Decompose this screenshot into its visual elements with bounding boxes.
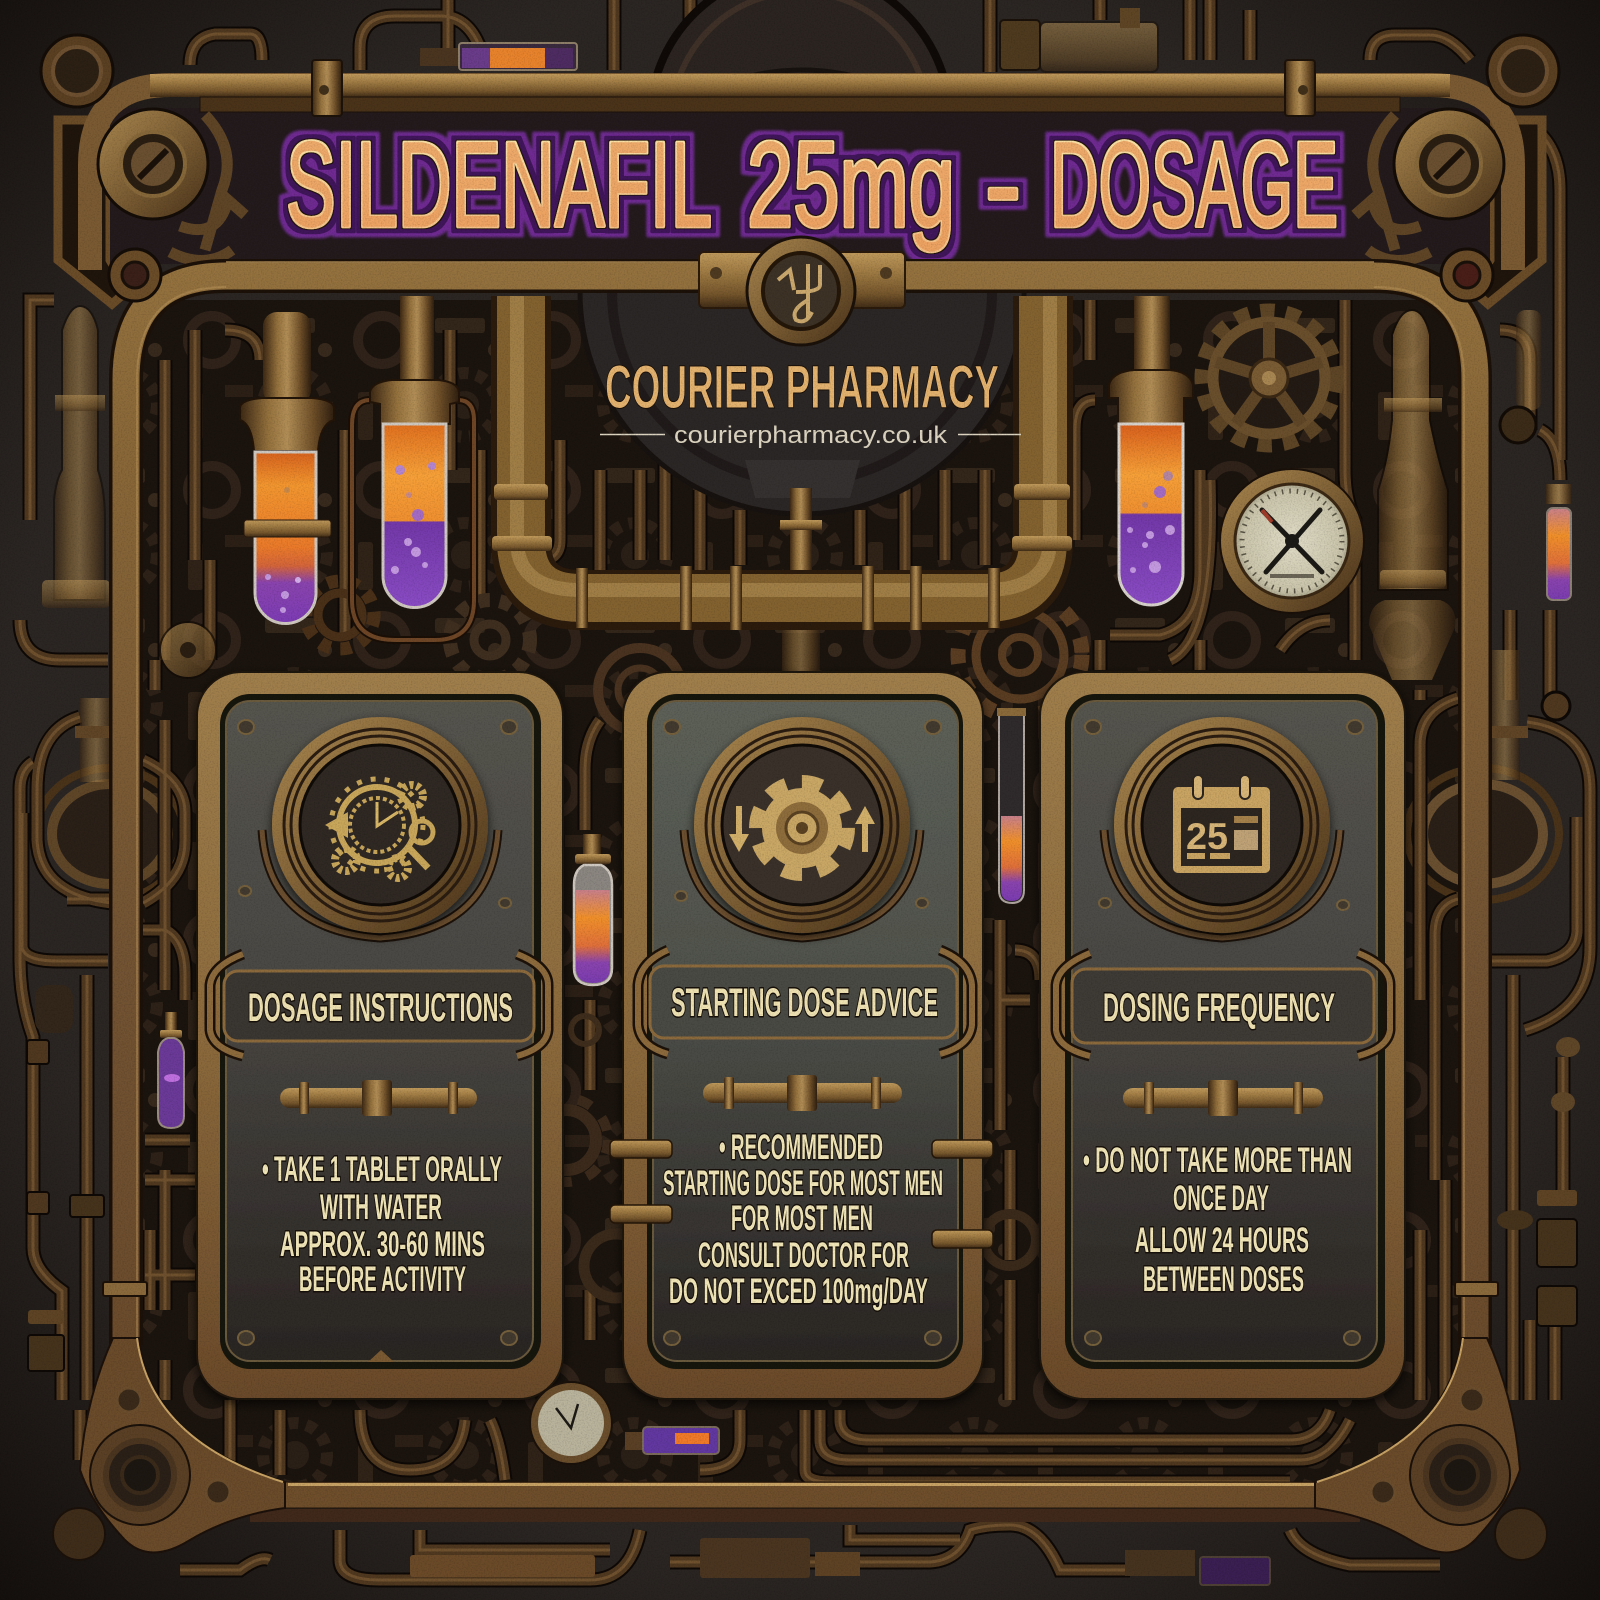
body text: ALLOW 24 HOURS (1135, 1221, 1309, 1260)
clamps (610, 1140, 993, 1248)
body text: WITH WATER (320, 1188, 442, 1227)
vial right (1546, 484, 1572, 600)
rusty ring: centre (598, 648, 682, 732)
corner bolt bottom left (53, 1388, 230, 1560)
bolt top left (98, 109, 208, 219)
test tube: left (240, 312, 334, 623)
body text (1083, 1141, 1352, 1299)
pipe divider (280, 1080, 477, 1116)
test tube: top horizontal vial (420, 43, 577, 70)
side plate left (58, 120, 128, 304)
card frame (197, 672, 563, 1399)
title: DOSAGE (1050, 116, 1338, 252)
machine: top right motor (1000, 8, 1158, 72)
centre medallion (699, 237, 905, 345)
right brass column (1369, 310, 1456, 680)
body text: APPROX. 30-60 MINS (280, 1225, 485, 1264)
bottom pipes (410, 1538, 1195, 1578)
title (286, 116, 1338, 252)
dosing frequency card (1040, 672, 1405, 1399)
vial between cards 1 and 2 (574, 834, 612, 985)
right corner (1315, 1338, 1520, 1552)
body text: BETWEEN DOSES (1143, 1260, 1304, 1299)
panel frame vertical bars and lower bar (126, 262, 1475, 1345)
icon: gear with up and down arrows porthole (684, 717, 920, 938)
body text: DO NOT EXCED 100mg/DAY (669, 1272, 928, 1311)
frame clamp lower left (103, 1282, 147, 1296)
dosage instructions card (197, 672, 563, 1399)
corner ring top right (1487, 35, 1559, 107)
main copper pipe (492, 296, 1072, 674)
left cylinder stub (75, 698, 113, 782)
left fittings (27, 985, 104, 1371)
rivets (1085, 720, 1363, 1345)
test tube: centre left (352, 296, 474, 640)
corner bolt bottom right (1371, 1388, 1547, 1560)
body text (262, 1150, 502, 1299)
pipe divider (1123, 1080, 1323, 1116)
frame clamp lower right (1455, 1282, 1498, 1296)
banner background (110, 108, 1490, 264)
frame clamp left (312, 60, 342, 116)
body text: • DO NOT TAKE MORE THAN (1083, 1141, 1352, 1180)
small brass valve (160, 622, 216, 678)
icon: clock and gears porthole (262, 717, 498, 938)
bolt top right (1394, 109, 1504, 219)
test tube: right (1109, 296, 1193, 605)
rusty gear: right lower (958, 593, 1082, 717)
starting dose advice card: STARTING DOSE FOR MOST MEN (663, 1164, 943, 1203)
ornate scrollwork right (1355, 115, 1430, 261)
bottom small vial (625, 1427, 719, 1454)
title: 25mg (747, 116, 955, 252)
corner ring top left (41, 35, 113, 107)
bottom purple vial (1200, 1557, 1270, 1585)
corner ring mid left (109, 249, 161, 301)
title: - (985, 116, 1021, 252)
upper frame (58, 74, 1542, 304)
ornate scrollwork left (170, 115, 245, 261)
gap gears between cards (524, 1016, 1036, 1298)
pipe divider (703, 1075, 902, 1111)
lower frame (80, 1338, 1520, 1552)
frame clamp right (1285, 60, 1315, 116)
left column brass cylinder (42, 306, 110, 608)
left corner (80, 1338, 285, 1552)
rusty gear: left lower (450, 600, 530, 680)
right ring assembly (1407, 768, 1559, 900)
corner ring mid right (1441, 249, 1493, 301)
bottom clock (530, 1382, 612, 1464)
body text (663, 1128, 943, 1311)
left ring assembly (36, 768, 184, 900)
pressure gauge (1220, 469, 1364, 613)
right column brass cylinder (outer) (1500, 310, 1542, 443)
body text: • TAKE 1 TABLET ORALLY (262, 1150, 502, 1189)
rusty gear: left (306, 581, 374, 649)
heading: DOSING FREQUENCY (1103, 986, 1335, 1030)
heading: STARTING DOSE ADVICE (671, 981, 938, 1025)
right cylinder stub (1490, 650, 1570, 780)
body text: BEFORE ACTIVITY (299, 1260, 466, 1299)
large bronze gear (1203, 312, 1335, 444)
right fittings (1497, 1037, 1580, 1326)
starting dose advice card (610, 672, 993, 1399)
body text: • RECOMMENDED (719, 1128, 883, 1167)
body text: CONSULT DOCTOR FOR (698, 1236, 909, 1275)
rivets (664, 720, 941, 1345)
pharmacy url: courierpharmacy.co.uk (674, 422, 948, 449)
pharmacy brand (600, 353, 1021, 449)
interior machinery backing (140, 300, 1460, 1490)
pharmacy dial backdrop (580, 70, 1024, 514)
heading: DOSAGE INSTRUCTIONS (248, 986, 513, 1030)
heading plate (210, 954, 548, 1056)
vial left (158, 1012, 184, 1128)
title: SILDENAFIL (286, 116, 712, 252)
heading plate (638, 950, 972, 1054)
top bar (90, 85, 1513, 270)
bottom bar (285, 1482, 1317, 1508)
pharmacy name: COURIER PHARMACY (605, 353, 999, 421)
card frame (1040, 672, 1405, 1399)
card frame (623, 672, 983, 1399)
body text: ONCE DAY (1173, 1179, 1269, 1218)
body text: FOR MOST MEN (731, 1199, 873, 1238)
tube between cards 2 and 3 (997, 708, 1026, 903)
icon: calendar porthole (1104, 717, 1340, 938)
side plate right (1472, 120, 1542, 304)
rivets (238, 720, 517, 1345)
heading plate (1056, 953, 1390, 1056)
icon: calendar porthole: 25 (1186, 816, 1228, 857)
machine: top centre dark wheel (650, 0, 950, 270)
